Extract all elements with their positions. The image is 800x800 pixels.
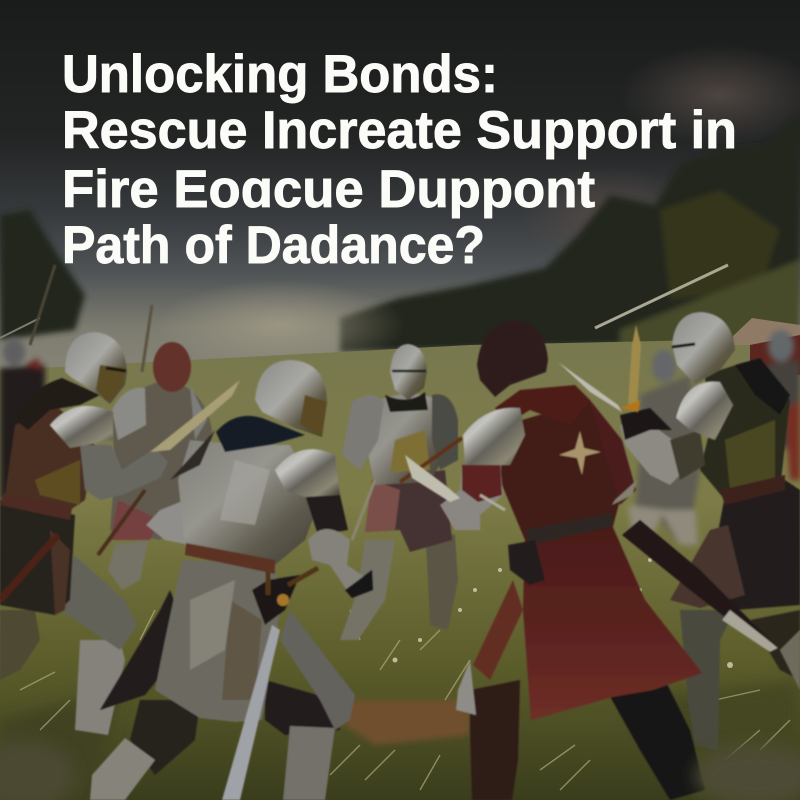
upper tabard bbox=[500, 400, 620, 540]
hood bbox=[15, 378, 100, 430]
legs bbox=[680, 610, 735, 750]
background knight with red helmet bbox=[30, 265, 212, 590]
title: Unlocking Bonds: bbox=[62, 45, 498, 104]
arm bbox=[80, 445, 168, 500]
hood bbox=[735, 358, 790, 415]
raised sword bbox=[628, 325, 641, 405]
title: Rescue Increate Support in bbox=[62, 101, 737, 160]
hood bbox=[495, 385, 590, 425]
belt bbox=[525, 513, 613, 545]
title: Fire Eoɑcue Duppont bbox=[62, 160, 595, 219]
knight in brown hood, left bbox=[0, 332, 240, 735]
center background knight bbox=[340, 344, 462, 640]
sword bbox=[150, 380, 240, 452]
lower tabard bbox=[523, 525, 702, 720]
belt gear bbox=[508, 540, 545, 585]
title bbox=[62, 45, 737, 275]
torso bbox=[365, 394, 445, 485]
foreground blurred foliage bbox=[0, 740, 800, 800]
blade bbox=[405, 455, 460, 502]
torso bbox=[178, 440, 320, 565]
knight in maroon tabard bbox=[405, 320, 778, 800]
skirt bbox=[710, 480, 800, 610]
pauldron bbox=[50, 406, 113, 448]
vest bbox=[700, 362, 790, 500]
background knights left bbox=[0, 338, 45, 500]
star emblem bbox=[559, 431, 601, 475]
grass field bbox=[0, 338, 800, 800]
flap bbox=[473, 580, 523, 680]
big knight in silver tabard bbox=[90, 360, 373, 800]
strap panel bbox=[280, 610, 355, 730]
helmet bbox=[65, 332, 127, 404]
sheathed sword bbox=[622, 520, 778, 652]
arm bbox=[305, 495, 348, 535]
legs bbox=[470, 680, 520, 800]
pauldron bbox=[676, 382, 733, 440]
rope fence and tents bbox=[0, 265, 800, 375]
skirt bbox=[365, 470, 452, 552]
background knight behind right swords bbox=[628, 330, 800, 545]
legs bbox=[340, 540, 395, 640]
sword bbox=[222, 625, 280, 800]
belt bbox=[185, 543, 275, 574]
greaves bbox=[90, 738, 155, 800]
sky background bbox=[0, 0, 800, 420]
forearm bbox=[440, 462, 503, 530]
left arm bbox=[146, 500, 190, 545]
belt bbox=[0, 493, 72, 520]
helmet bbox=[672, 312, 735, 384]
title: Path of Dadance? bbox=[62, 216, 485, 275]
thigh bbox=[45, 535, 137, 650]
dark legs bbox=[130, 700, 200, 775]
knee cop bbox=[456, 660, 476, 715]
greave bbox=[75, 640, 125, 735]
helmet bbox=[390, 344, 427, 400]
treeline bbox=[0, 115, 800, 352]
chest bbox=[5, 405, 95, 510]
dark skirt bbox=[0, 500, 75, 615]
back flap bbox=[100, 590, 190, 710]
dust haze bbox=[155, 280, 405, 370]
hood bbox=[216, 416, 305, 452]
arm bbox=[620, 420, 690, 485]
dark arm bbox=[590, 400, 636, 505]
helmet bbox=[477, 320, 548, 397]
pauldron bbox=[463, 408, 525, 465]
back leg bbox=[0, 610, 40, 680]
helmet bbox=[255, 360, 327, 437]
pauldron bbox=[275, 449, 340, 497]
lower tabard bbox=[155, 560, 280, 722]
right knight in dark vest bbox=[558, 312, 800, 750]
